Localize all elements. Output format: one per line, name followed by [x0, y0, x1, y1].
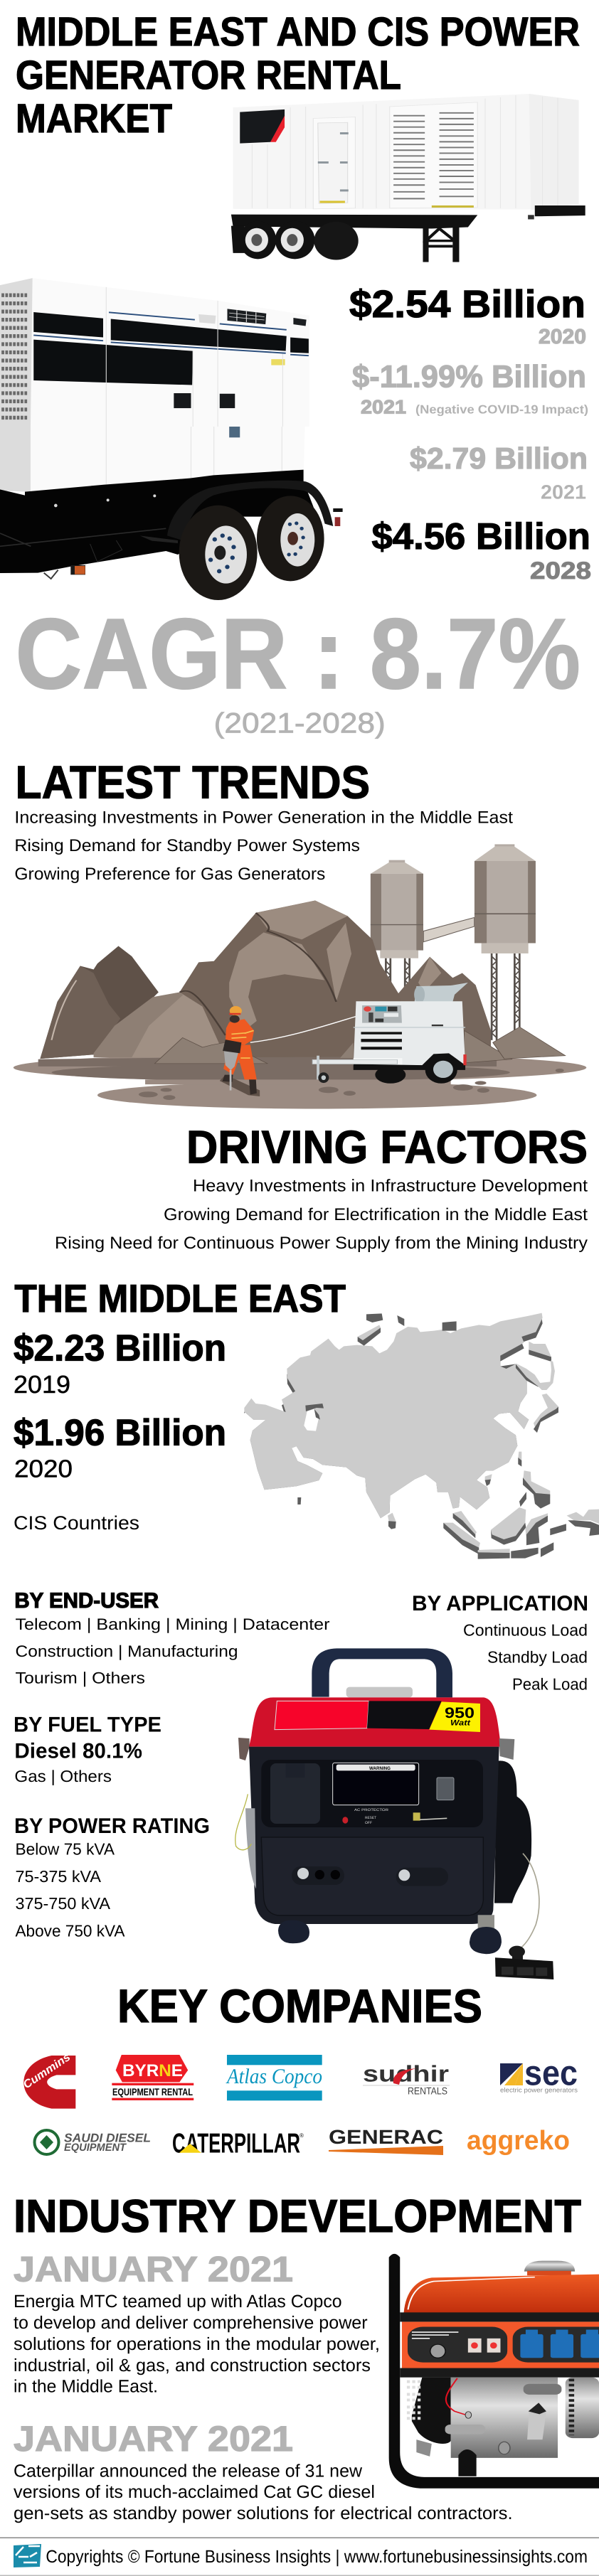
factors list: Heavy Investments in Infrastructure Development [193, 1177, 588, 1196]
stat: 2021 negative impact [352, 360, 588, 418]
development: Caterpillar gen-sets: JANUARY 2021 [14, 2419, 293, 2459]
stat: 2020 value: $2.54 Billion [349, 283, 585, 326]
power rating list: 375-750 kVA [16, 1894, 111, 1913]
logo: Generac: GENERAC [329, 2126, 443, 2148]
rocks [40, 901, 566, 1064]
worker with jackhammer [220, 1006, 260, 1096]
panel: driving factors [55, 1121, 588, 1253]
development: Energia MTC and Atlas Copco: industrial, oil & gas, and construction sectors [14, 2356, 371, 2375]
label: CIS countries: CIS Countries [14, 1512, 139, 1534]
power rating list [16, 1840, 125, 1940]
logo: Sudhir [363, 2061, 450, 2097]
development: Caterpillar gen-sets: gen-sets as standby power solutions for electrical contractors. [14, 2503, 513, 2523]
stat: 2021 negative impact: $-11.99% Billion [352, 360, 586, 395]
heading: by application: BY APPLICATION [412, 1592, 588, 1615]
panel: by end-user [14, 1589, 330, 1687]
logo: Byrne [112, 2055, 194, 2100]
logo: Aggreko: aggreko [467, 2126, 570, 2156]
stat: 2020 [14, 1413, 226, 1483]
end-user list: Tourism | Others [16, 1669, 145, 1687]
label: warning: WARNING [369, 1766, 391, 1771]
heading: industry development: INDUSTRY DEVELOPMENT [14, 2190, 581, 2242]
icon: portable red generator [235, 1648, 553, 1979]
stat: 2020 value: 2020 [539, 326, 586, 348]
diesel share: Diesel 80.1% [14, 1740, 142, 1763]
stat: 2021 negative impact: 2021 [361, 397, 406, 418]
icon: orange framed generator [389, 2254, 599, 2489]
logo: Saudi Diesel: SAUDI DIESEL [64, 2132, 151, 2145]
label: AC protector: AC PROTECTOR [354, 1808, 388, 1812]
stat: 2020: 2020 [14, 1455, 73, 1483]
stat: 2020: $1.96 Billion [14, 1413, 226, 1454]
development: Caterpillar gen-sets: versions of its much-acclaimed Cat GC diesel [14, 2482, 375, 2502]
panel: key companies [21, 1979, 578, 2159]
label: wattage [445, 1705, 475, 1728]
title: MARKET [16, 96, 172, 141]
factors list: Growing Demand for Electrification in the Middle East [164, 1205, 588, 1224]
logo: Sudhir: sudhir [363, 2061, 449, 2087]
label: AC protector: OFF [365, 1821, 372, 1825]
cable [250, 1014, 365, 1042]
stat: 2021 value [410, 442, 588, 503]
icon: container generator trailer [231, 94, 585, 262]
development: Caterpillar gen-sets [14, 2419, 513, 2523]
logo: Generac [329, 2126, 443, 2155]
logo: Atlas Copco: Atlas Copco [226, 2065, 322, 2088]
panel: by application [412, 1592, 588, 1694]
trends list [14, 808, 513, 884]
logo: Caterpillar: ® [300, 2132, 304, 2139]
label: AC protector [354, 1808, 388, 1825]
heading: key companies: KEY COMPANIES [117, 1979, 482, 2032]
logo: SEC [500, 2053, 578, 2093]
trends list: Growing Preference for Gas Generators [14, 865, 325, 884]
development: Caterpillar gen-sets: Caterpillar announced the release of 31 new [14, 2462, 363, 2481]
development: Energia MTC and Atlas Copco: in the Middle East. [14, 2377, 158, 2397]
panel: the middle east [14, 1276, 346, 1534]
heading: by fuel type: BY FUEL TYPE [14, 1714, 161, 1737]
logo: Byrne: BYRNE [122, 2061, 183, 2080]
icon: towable generator [0, 278, 343, 600]
logo: Caterpillar: CATERPILLAR [172, 2129, 300, 2159]
stat: 2019: 2019 [14, 1371, 70, 1399]
logo: Cummins: Cummins [21, 2051, 73, 2091]
end-user list: Construction | Manufacturing [16, 1642, 238, 1660]
silo towers [371, 844, 536, 1040]
title [16, 9, 580, 141]
logo: SEC: electric power generators [500, 2086, 578, 2093]
end-user list [16, 1615, 330, 1687]
illustration: mining site with generator [14, 844, 586, 1108]
factors list: Rising Need for Continuous Power Supply from the Mining Industry [55, 1234, 588, 1253]
power rating list: Below 75 kVA [16, 1840, 115, 1859]
mobile generator [312, 983, 468, 1084]
logo: Caterpillar [172, 2129, 304, 2159]
application list: Peak Load [512, 1675, 588, 1694]
CAGR callout: (2021-2028) [214, 708, 386, 739]
stat: 2028 value: 2028 [530, 557, 591, 584]
icon: Fortune Business Insights logo [14, 2544, 41, 2567]
logo: Saudi Diesel: EQUIPMENT [64, 2142, 127, 2154]
fuel others: Gas | Others [14, 1767, 112, 1785]
power rating list: Above 750 kVA [16, 1921, 125, 1940]
stat: 2028 value: $4.56 Billion [371, 516, 590, 557]
logo: Sudhir: RENTALS [408, 2085, 447, 2097]
trends list: Rising Demand for Standby Power Systems [14, 836, 360, 855]
development: Energia MTC and Atlas Copco [14, 2250, 380, 2397]
logo: Byrne: EQUIPMENT RENTAL [112, 2086, 193, 2097]
heading: latest trends: LATEST TRENDS [16, 756, 370, 808]
market stats [349, 283, 591, 584]
power rating list: 75-375 kVA [16, 1867, 102, 1886]
logo: Cummins [21, 2051, 75, 2109]
factors list [55, 1177, 588, 1253]
stat: 2019: $2.23 Billion [14, 1328, 226, 1369]
stat: 2021 value: $2.79 Billion [410, 442, 588, 475]
development: Energia MTC and Atlas Copco: solutions for operations in the modular power, [14, 2334, 380, 2354]
application list: Continuous Load [463, 1621, 588, 1640]
development: Energia MTC and Atlas Copco: Energia MTC teamed up with Atlas Copco [14, 2292, 342, 2312]
trends list: Increasing Investments in Power Generation in the Middle East [14, 808, 513, 828]
stat: 2021 value: 2021 [541, 481, 586, 503]
logo: Atlas Copco [226, 2055, 322, 2100]
stat: 2019 [14, 1328, 226, 1399]
heading: by power rating: BY POWER RATING [14, 1815, 210, 1838]
logo: SEC: sec [524, 2053, 578, 2093]
stat: 2021 negative impact: (Negative COVID-19 Impact) [415, 403, 588, 417]
label: AC protector: RESET [365, 1816, 376, 1820]
heading: the middle east: THE MIDDLE EAST [14, 1276, 346, 1320]
footer [0, 2537, 599, 2576]
panel: industry development [14, 2190, 581, 2523]
label: wattage: 950 [445, 1705, 475, 1721]
application list [463, 1621, 588, 1694]
ground [14, 1054, 586, 1108]
label: wattage: Watt [450, 1719, 472, 1728]
panel: by power rating [14, 1815, 210, 1940]
stat: 2020 value [349, 283, 586, 348]
development: Energia MTC and Atlas Copco: to develop and deliver comprehensive power [14, 2313, 368, 2333]
panel: by fuel type [14, 1714, 161, 1785]
development: Energia MTC and Atlas Copco: JANUARY 2021 [14, 2250, 293, 2289]
title: GENERATOR RENTAL [16, 53, 401, 98]
application list: Standby Load [487, 1648, 588, 1667]
end-user list: Telecom | Banking | Mining | Datacenter [16, 1615, 330, 1633]
logo: Saudi Diesel [34, 2130, 151, 2154]
panel: latest trends [14, 756, 513, 884]
heading: by end-user: BY END-USER [14, 1589, 159, 1613]
stat: 2028 value [371, 516, 591, 584]
map: Asia [244, 1313, 599, 1559]
